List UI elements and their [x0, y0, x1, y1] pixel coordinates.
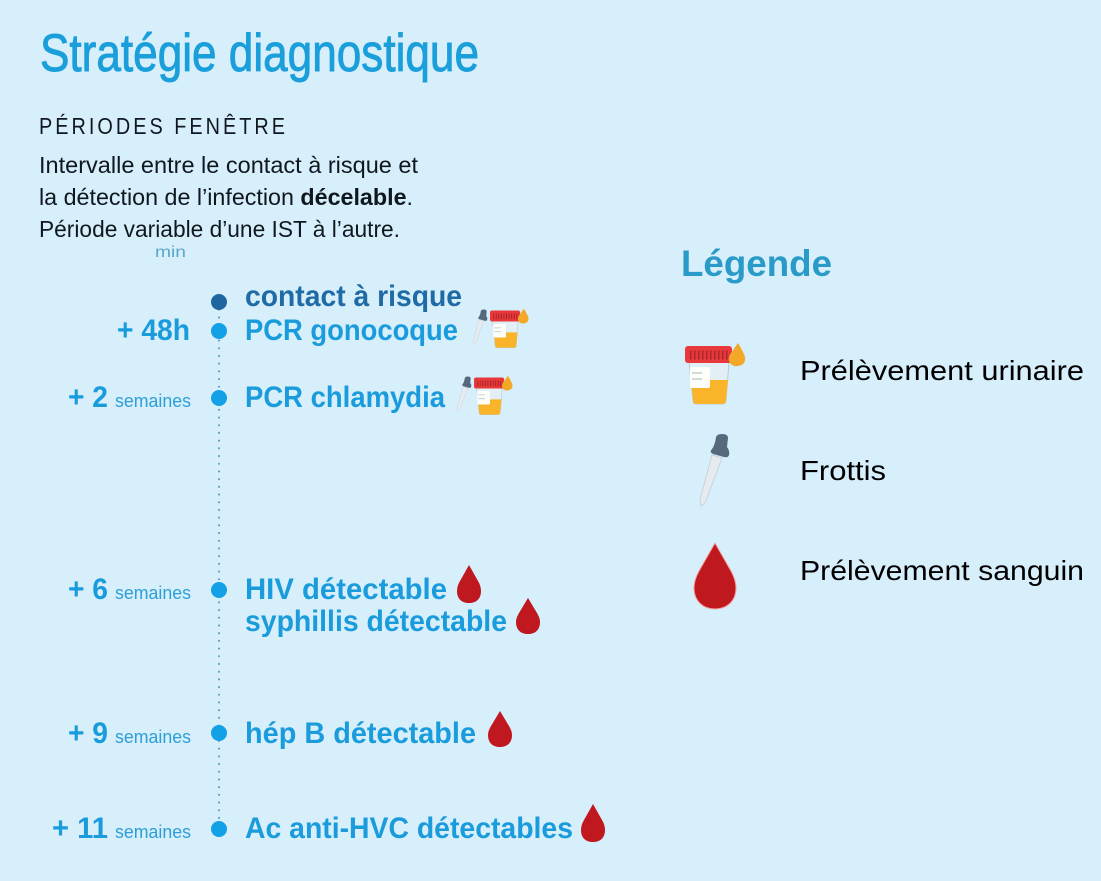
text block: definition: [39, 152, 419, 242]
icon: blood drop: [488, 711, 512, 747]
legend label: sanguin: Prélèvement sanguin: [800, 555, 1084, 586]
row: + 6 semaines HIV and syphillis: HIV détectable: [245, 573, 447, 606]
row: + 48h PCR gonocoque: + 48h: [117, 314, 190, 347]
row: + 2 semaines PCR chlamydia: + 2: [68, 381, 108, 414]
row: + 9 semaines hép B: hép B détectable: [245, 717, 476, 750]
legend label: frottis: Frottis: [800, 455, 886, 486]
legend panel: [681, 243, 1084, 609]
icon: urine cup: [474, 376, 512, 415]
row: + 11 semaines Ac anti-HVC: semaines: [115, 822, 191, 842]
timeline dot: 11 semaines: [211, 821, 227, 837]
row: + 9 semaines hép B: [68, 711, 512, 750]
row: + 11 semaines Ac anti-HVC: Ac anti-HVC détectables: [245, 812, 573, 845]
text block: definition: Intervalle entre le contact à risque et: [39, 152, 419, 178]
timeline dot: 6 semaines: [211, 582, 227, 598]
row: + 6 semaines HIV and syphillis: syphillis détectable: [245, 605, 507, 638]
icon: blood drop: [581, 804, 605, 842]
icon: dropper: [457, 376, 471, 412]
row: + 9 semaines hép B: semaines: [115, 727, 191, 747]
text block: definition: Période variable d’une IST à l’autre.: [39, 216, 400, 242]
timeline dot: 9 semaines: [211, 725, 227, 741]
row: + 2 semaines PCR chlamydia: PCR chlamydia: [245, 381, 445, 414]
row: + 9 semaines hép B: + 9: [68, 717, 108, 750]
icon: blood drop: [457, 565, 481, 603]
timeline dot: 2 semaines: [211, 390, 227, 406]
timeline dot: contact à risque: [211, 294, 227, 310]
legend icon: dropper: [700, 434, 729, 506]
timeline: [211, 294, 227, 837]
row: + 48h PCR gonocoque: PCR gonocoque: [245, 314, 458, 347]
row: + 48h PCR gonocoque: [117, 309, 528, 348]
row: + 6 semaines HIV and syphillis: + 6: [68, 573, 108, 606]
row: + 2 semaines PCR chlamydia: [68, 376, 512, 415]
row: + 6 semaines HIV and syphillis: semaines: [115, 583, 191, 603]
label: min: min: [155, 244, 186, 261]
row: + 11 semaines Ac anti-HVC: + 11: [52, 812, 108, 845]
title: Stratégie diagnostique: [40, 24, 479, 83]
row: + 2 semaines PCR chlamydia: semaines: [115, 391, 191, 411]
legend heading: Légende: [681, 243, 832, 284]
legend label: urine: Prélèvement urinaire: [800, 355, 1084, 386]
row label: contact à risque: contact à risque: [245, 280, 462, 313]
legend icon: urine cup: [685, 343, 745, 404]
row: + 6 semaines HIV and syphillis: [68, 565, 540, 638]
row: + 11 semaines Ac anti-HVC: [52, 804, 605, 845]
timeline dot: 48h: [211, 323, 227, 339]
icon: dropper: [473, 309, 487, 345]
subheading: périodes fenêtre: PÉRIODES FENÊTRE: [39, 113, 288, 139]
icon: blood drop: [516, 598, 540, 634]
legend icon: blood drop: [694, 543, 736, 609]
text block: definition: la détection de l’infection décelable.: [39, 184, 413, 210]
icon: urine cup: [490, 309, 528, 348]
